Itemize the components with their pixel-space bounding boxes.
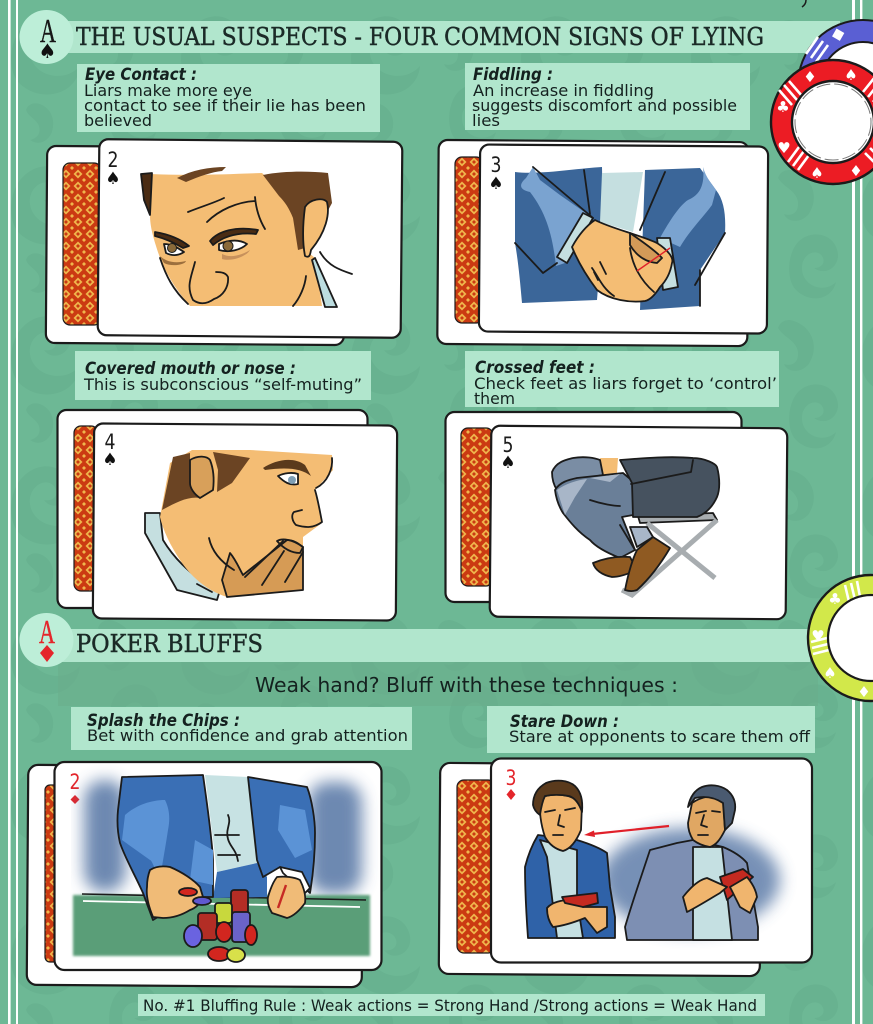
- chip: red poker chip: ♦: [849, 162, 863, 180]
- panel: crossed feet text: Check feet as liars forget to ‘control’: [474, 374, 777, 393]
- panel: stare down text: Stare Down :: [510, 712, 619, 731]
- panel: splash the chips text: [71, 707, 412, 750]
- illustration: hands splashing chips: [73, 775, 370, 962]
- chip: lime poker chip: ♠: [823, 664, 837, 682]
- panel: crossed feet text: Crossed feet :: [475, 358, 595, 377]
- subheading: Weak hand? Bluff with these techniques :: [255, 673, 678, 697]
- panel: fiddling text: [465, 63, 750, 130]
- section header: poker bluffs: [20, 613, 810, 667]
- panel: eye contact text: believed: [84, 111, 152, 130]
- card: 3 of spades, fiddling: ♠: [488, 174, 504, 194]
- panel: fiddling text: An increase in fiddling: [473, 81, 654, 100]
- ace of diamonds badge: A: [39, 614, 55, 651]
- panel: eye contact text: Liars make more eye: [84, 81, 252, 100]
- ace of spades badge: ♠: [39, 39, 56, 63]
- panel: eye contact text: [77, 64, 380, 132]
- card: 3 of spades, fiddling: 3: [490, 153, 502, 177]
- card: 2 of spades, eye contact: 2: [108, 148, 118, 172]
- panel: fiddling text: lies: [472, 111, 500, 130]
- illustration: hands fiddling: [515, 167, 725, 310]
- man on the left: [525, 781, 615, 938]
- card: 4 of spades, covered mouth: ♠: [102, 450, 118, 470]
- ace of diamonds badge: [39, 614, 55, 662]
- chip: red poker chip: ♦: [803, 68, 817, 86]
- panel: fiddling text: suggests discomfort and possible: [472, 96, 737, 115]
- panel: covered mouth text: This is subconscious “self-muting”: [83, 375, 362, 394]
- panel: stare down text: [487, 706, 815, 753]
- man on the right: [625, 785, 758, 940]
- chip: blue poker chip: [798, 20, 873, 150]
- card: 4 of spades, covered mouth: [58, 410, 397, 621]
- card: 3 of spades, fiddling: [437, 140, 768, 346]
- section header: poker bluffs: POKER BLUFFS: [76, 630, 263, 658]
- card: 4 of spades, covered mouth: 4: [104, 430, 116, 454]
- card: 5 of spades, crossed feet: ♠: [500, 453, 516, 473]
- chip: lime poker chip: ♦: [857, 683, 871, 701]
- panel: eye contact text: Eye Contact :: [85, 65, 197, 84]
- card: 2 of spades, eye contact: ♠: [105, 169, 121, 189]
- chip: lime poker chip: [808, 575, 873, 701]
- panel: crossed feet text: [465, 351, 779, 408]
- panel: crossed feet text: them: [474, 389, 515, 408]
- stare arrow: [584, 826, 669, 837]
- illustration: two men staring down: [525, 781, 780, 940]
- chip: red poker chip: ♠: [844, 66, 858, 84]
- panel: covered mouth text: [75, 351, 371, 400]
- card: 2 of spades, eye contact: [46, 139, 402, 345]
- panel: splash the chips text: Bet with confidence and grab attention: [87, 726, 408, 745]
- chip: red poker chip: ♥: [777, 139, 791, 157]
- card: 2 of diamonds, splash the chips: [27, 762, 381, 987]
- panel: covered mouth text: Covered mouth or nose :: [85, 359, 296, 378]
- card: 3 of diamonds, stare down: [439, 758, 812, 976]
- chip: lime poker chip: ♥: [811, 627, 825, 645]
- card: 5 of spades, crossed feet: [446, 412, 787, 619]
- panel: eye contact text: contact to see if their lie has been: [84, 96, 366, 115]
- panel: splash the chips text: Splash the Chips :: [87, 711, 240, 730]
- chip: red poker chip: ♠: [810, 164, 824, 182]
- chip: red poker chip: [771, 60, 873, 184]
- chip: red poker chip: ♣: [776, 98, 790, 116]
- illustration: man looking sideways: [141, 167, 352, 307]
- section header: the usual suspects: [20, 10, 840, 64]
- card: 2 of diamonds, splash the chips: 2: [70, 770, 80, 794]
- illustration: man covering mouth: [145, 450, 333, 600]
- chip: lime poker chip: ♣: [828, 590, 842, 608]
- illustration: crossed feet on stool: [552, 457, 719, 595]
- ace of spades badge: [39, 13, 56, 63]
- panel: stare down text: Stare at opponents to scare them off: [509, 727, 811, 746]
- panel: fiddling text: Fiddling :: [473, 65, 553, 84]
- card: 3 of diamonds, stare down: 3: [506, 766, 516, 790]
- bluffing rule callout: No. #1 Bluffing Rule : Weak actions = Strong Hand /Strong actions = Weak Hand: [143, 996, 757, 1015]
- section header: the usual suspects: THE USUAL SUSPECTS - FOUR COMMON SIGNS OF LYING: [76, 23, 764, 51]
- card: 5 of spades, crossed feet: 5: [502, 433, 514, 457]
- ace of spades badge: A: [40, 13, 56, 50]
